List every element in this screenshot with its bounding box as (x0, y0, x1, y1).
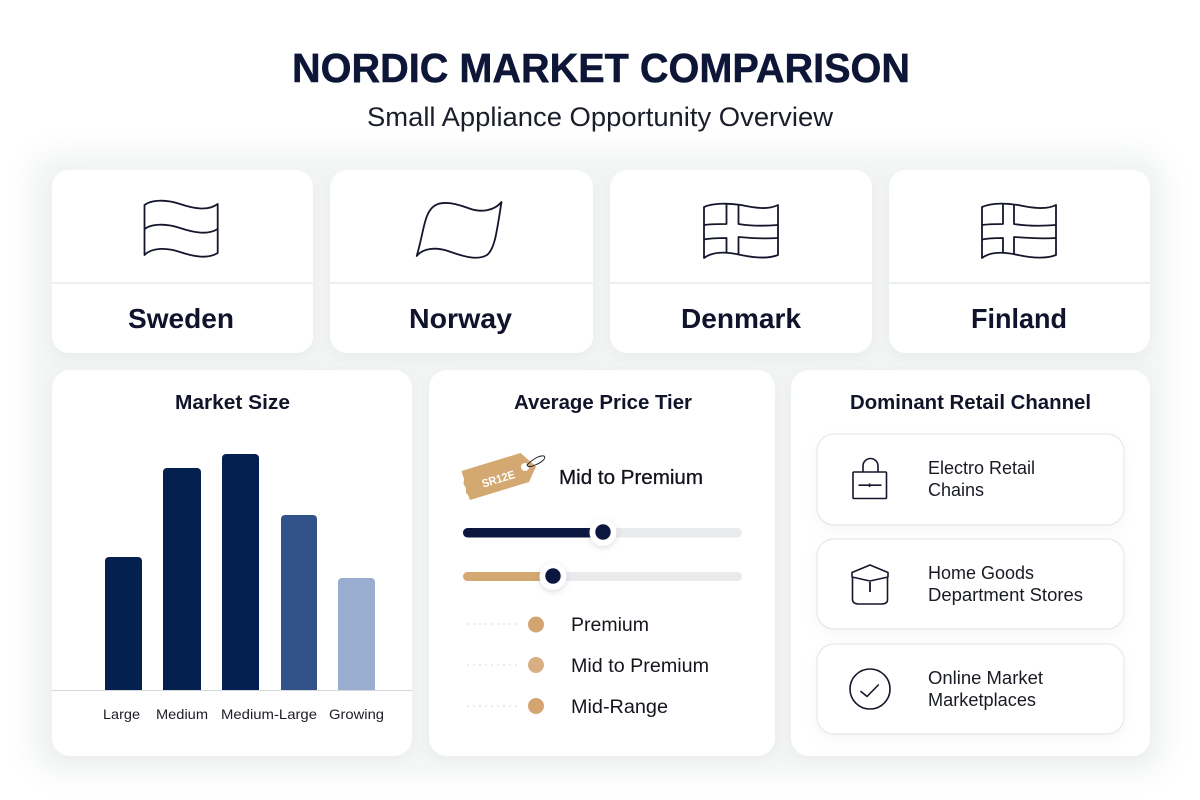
text: Online Market Marketplaces (928, 668, 1043, 710)
text: Electro Retail Chains: Chains (928, 480, 984, 500)
icon: price tag: SR12E (481, 469, 517, 491)
bar: Growing (338, 578, 375, 690)
panel: Dominant Retail Channel (791, 370, 1150, 756)
label: Finland: Finland (971, 303, 1067, 334)
title: NORDIC MARKET COMPARISON (292, 45, 910, 91)
icon: Sweden flag (144, 201, 218, 257)
bar chart (52, 454, 412, 722)
text: Home Goods Department Stores (928, 563, 1083, 605)
slider: navy (463, 519, 742, 546)
label: Sweden: Sweden (128, 303, 234, 334)
channel card: Electro Retail Chains (817, 434, 1124, 525)
panel: Market Size (52, 370, 412, 756)
legend item: Mid to Premium: Mid to Premium (571, 656, 709, 677)
bar: Medium (163, 468, 201, 690)
slider: tan (463, 563, 742, 590)
panel: Finland (889, 170, 1150, 353)
legend item: Mid to Premium (467, 656, 709, 677)
panel: Denmark (610, 170, 872, 353)
text: Online Market Marketplaces: Online Market (928, 668, 1043, 688)
heading: Average Price Tier: Average Price Tier (514, 392, 692, 414)
text: Electro Retail Chains: Electro Retail (928, 458, 1035, 478)
icon: price tag (462, 453, 545, 500)
text: Home Goods Department Stores: Department Stores (928, 585, 1083, 605)
panel: Norway (330, 170, 593, 353)
text: Online Market Marketplaces: Marketplaces (928, 690, 1036, 710)
legend item: Mid-Range (467, 697, 668, 718)
heading: Dominant Retail Channel: Dominant Retail Channel (850, 392, 1091, 414)
axis label: Growing: Growing (329, 706, 384, 722)
legend item: Mid-Range: Mid-Range (571, 697, 668, 718)
text: Electro Retail Chains (928, 458, 1035, 500)
bar: Large (105, 557, 142, 690)
icon: Norway flag (417, 202, 502, 258)
icon: Finland flag (982, 204, 1056, 258)
icon: Denmark flag (704, 204, 778, 258)
panel: Sweden (52, 170, 313, 353)
label: Mid to Premium: Mid to Premium (559, 467, 703, 489)
label: Denmark: Denmark (681, 303, 801, 334)
bar: Medium-Large (222, 454, 259, 690)
channel card: Online Market Marketplaces (817, 644, 1124, 734)
legend item: Premium: Premium (571, 615, 649, 636)
axis label: Medium-Large: Medium-Large (221, 706, 317, 722)
icon: shopping bag (853, 458, 886, 498)
axis label: Large: Large (103, 706, 140, 722)
heading: Market Size: Market Size (175, 392, 290, 414)
channel card: Home Goods Department Stores (817, 539, 1124, 629)
axis label: Medium: Medium (156, 706, 208, 722)
text: Home Goods Department Stores: Home Goods (928, 563, 1034, 583)
label: Norway: Norway (409, 303, 512, 334)
icon: box (852, 565, 888, 604)
subtitle: Small Appliance Opportunity Overview (367, 102, 834, 132)
bar: fourth (281, 515, 317, 690)
legend item: Premium (467, 615, 649, 636)
panel: Average Price Tier (429, 370, 775, 756)
icon: check circle (850, 669, 890, 709)
